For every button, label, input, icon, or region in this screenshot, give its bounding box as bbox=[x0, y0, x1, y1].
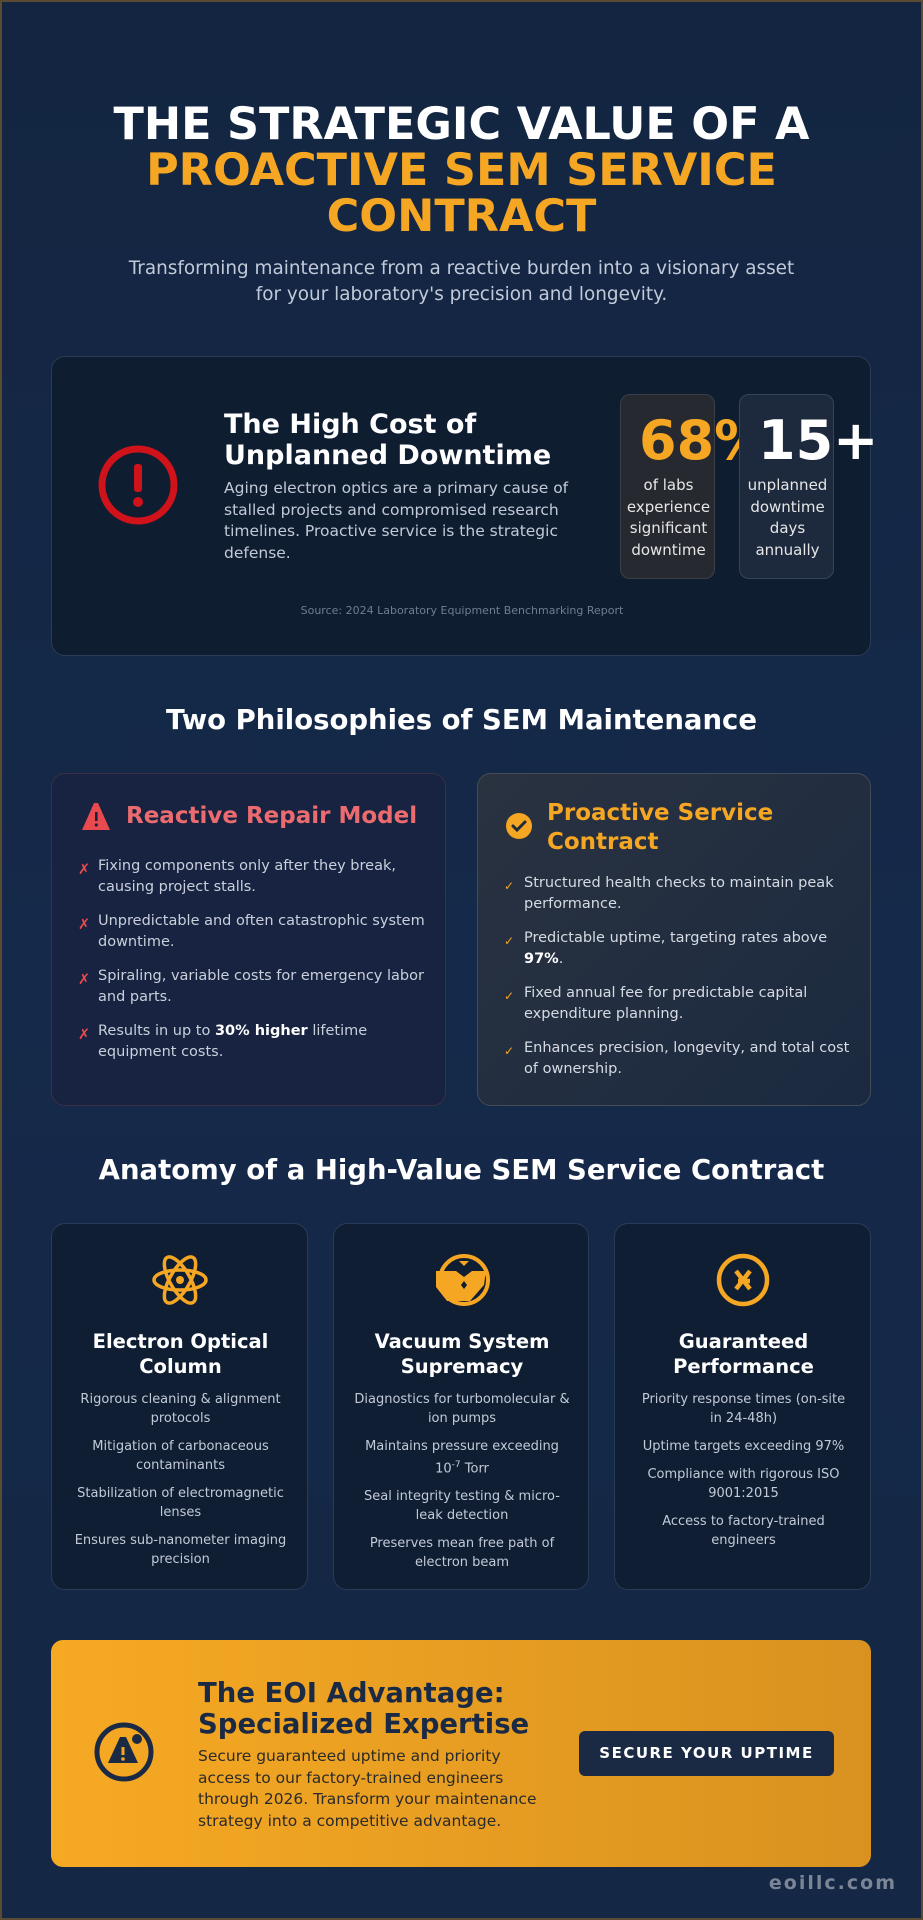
icon: flask badge bbox=[94, 1722, 154, 1782]
list: Unpredictable and often catastrophic system downtime. bbox=[98, 913, 425, 950]
list: Priority response times (on-site in 24-48h) bbox=[642, 1392, 845, 1426]
stat: 68%: 68% bbox=[639, 409, 768, 472]
icon: check circle bbox=[506, 813, 532, 839]
source: Source: 2024 Laboratory Equipment Benchmarking Report bbox=[301, 604, 623, 617]
panel: proactive bbox=[477, 773, 871, 1106]
heading: Performance bbox=[673, 1355, 814, 1378]
heading bbox=[198, 1677, 529, 1740]
heading: anatomy: Anatomy of a High-Value SEM Service Contract bbox=[99, 1154, 824, 1186]
stat: 68%: of labs bbox=[644, 476, 693, 494]
stat: 15+: downtime bbox=[750, 498, 825, 516]
panel: reactive bbox=[51, 773, 446, 1106]
stat: 68% bbox=[620, 394, 715, 579]
list: Seal integrity testing & micro- bbox=[364, 1489, 560, 1504]
heading: The EOI Advantage: bbox=[198, 1677, 505, 1709]
title: CONTRACT bbox=[327, 191, 596, 242]
list: Preserves mean free path of electron beam bbox=[370, 1536, 554, 1570]
list: Maintains pressure exceeding 10-7 Torr bbox=[365, 1439, 559, 1476]
list: ✗ bbox=[78, 972, 90, 988]
heading: Reactive Repair Model bbox=[126, 803, 417, 829]
list: Mitigation of carbonaceous contaminants bbox=[92, 1439, 269, 1473]
heading: Column bbox=[139, 1355, 222, 1378]
list: Rigorous cleaning & alignment protocols bbox=[80, 1392, 281, 1426]
stat: 15+: annually bbox=[755, 540, 820, 558]
list: Fixed annual fee for predictable capital expenditure planning. bbox=[524, 985, 807, 1022]
heading: The High Cost of bbox=[224, 409, 476, 440]
stat: 68%: experience bbox=[627, 498, 710, 516]
text block: Secure guaranteed uptime and priority access to our factory-trained engineers through 2026. Transform your maintenance strategy into a competitive advantage. bbox=[198, 1747, 536, 1830]
list: Results in up to 30% higher lifetime equipment costs. bbox=[98, 1023, 367, 1060]
button: SECURE YOUR UPTIME bbox=[599, 1744, 814, 1762]
list: ✓ bbox=[504, 1044, 514, 1058]
title: PROACTIVE SEM SERVICE bbox=[146, 145, 777, 196]
list: Compliance with rigorous ISO 9001:2015 bbox=[647, 1467, 840, 1501]
heading bbox=[374, 1330, 549, 1378]
list: ✗ bbox=[78, 917, 90, 933]
panel: vacuum system bbox=[333, 1223, 589, 1590]
list: Spiraling, variable costs for emergency labor and parts. bbox=[98, 968, 424, 1005]
panel: CTA bbox=[51, 1640, 871, 1867]
list: ✓ bbox=[504, 934, 514, 948]
heading bbox=[673, 1330, 814, 1378]
heading bbox=[93, 1330, 268, 1378]
heading: Specialized Expertise bbox=[198, 1708, 529, 1740]
stat: 15+ bbox=[739, 394, 834, 579]
panel: guaranteed performance bbox=[614, 1223, 871, 1590]
heading: Unplanned Downtime bbox=[224, 440, 551, 471]
list: Access to factory-trained engineers bbox=[662, 1514, 825, 1548]
footer brand: eoillc.com bbox=[769, 1872, 897, 1894]
icon: warning flask bbox=[82, 803, 110, 830]
list: Stabilization of electromagnetic lenses bbox=[77, 1486, 284, 1520]
icon: alert bbox=[98, 446, 178, 524]
stat: 15+: unplanned bbox=[748, 476, 827, 494]
list: Structured health checks to maintain peak performance. bbox=[524, 875, 834, 912]
subtitle: Transforming maintenance from a reactive burden into a visionary asset bbox=[129, 258, 794, 279]
heading: Guaranteed bbox=[679, 1330, 808, 1353]
icon: atom bbox=[152, 1255, 208, 1305]
heading: Supremacy bbox=[401, 1355, 523, 1378]
list bbox=[75, 1392, 286, 1567]
panel: electron optical column bbox=[51, 1223, 308, 1590]
heading: Proactive Service bbox=[547, 800, 773, 826]
icon: vacuum gauge bbox=[436, 1254, 490, 1306]
stat: 15+: 15+ bbox=[758, 409, 878, 472]
heading: Contract bbox=[547, 829, 659, 855]
list: Ensures sub-nanometer imaging precision bbox=[75, 1533, 286, 1567]
stat: 68%: significant bbox=[630, 519, 707, 537]
list: leak detection bbox=[416, 1508, 508, 1523]
heading: two philosophies: Two Philosophies of SEM Maintenance bbox=[166, 704, 757, 736]
list: Enhances precision, longevity, and total cost of ownership. bbox=[524, 1040, 849, 1077]
heading: Electron Optical bbox=[93, 1330, 268, 1353]
icon: x circle bbox=[716, 1254, 770, 1306]
subtitle: for your laboratory's precision and longevity. bbox=[256, 284, 667, 305]
heading bbox=[547, 800, 773, 855]
heading bbox=[224, 409, 551, 471]
list bbox=[642, 1392, 845, 1548]
subtitle bbox=[128, 258, 794, 305]
text block: Aging electron optics are a primary cause of stalled projects and compromised research timelines. Proactive service is the strategic defense. bbox=[224, 479, 568, 562]
list: ✗ bbox=[78, 862, 90, 878]
heading: Vacuum System bbox=[375, 1330, 549, 1353]
list: Uptime targets exceeding 97% bbox=[643, 1439, 844, 1454]
list bbox=[354, 1392, 570, 1570]
panel: high cost of downtime bbox=[51, 356, 871, 656]
list: Fixing components only after they break, causing project stalls. bbox=[98, 858, 396, 895]
button bbox=[579, 1731, 834, 1776]
list bbox=[78, 858, 425, 1060]
title: THE STRATEGIC VALUE OF A bbox=[114, 99, 809, 150]
title bbox=[114, 99, 810, 242]
list: ✓ bbox=[504, 879, 514, 893]
list: Predictable uptime, targeting rates above 97%. bbox=[524, 930, 827, 967]
stat: 68%: downtime bbox=[631, 540, 706, 558]
list bbox=[504, 875, 849, 1077]
list: ✓ bbox=[504, 989, 514, 1003]
list: Diagnostics for turbomolecular & ion pumps bbox=[354, 1392, 570, 1426]
list: ✗ bbox=[78, 1027, 90, 1043]
stat: 15+: days bbox=[770, 519, 805, 537]
